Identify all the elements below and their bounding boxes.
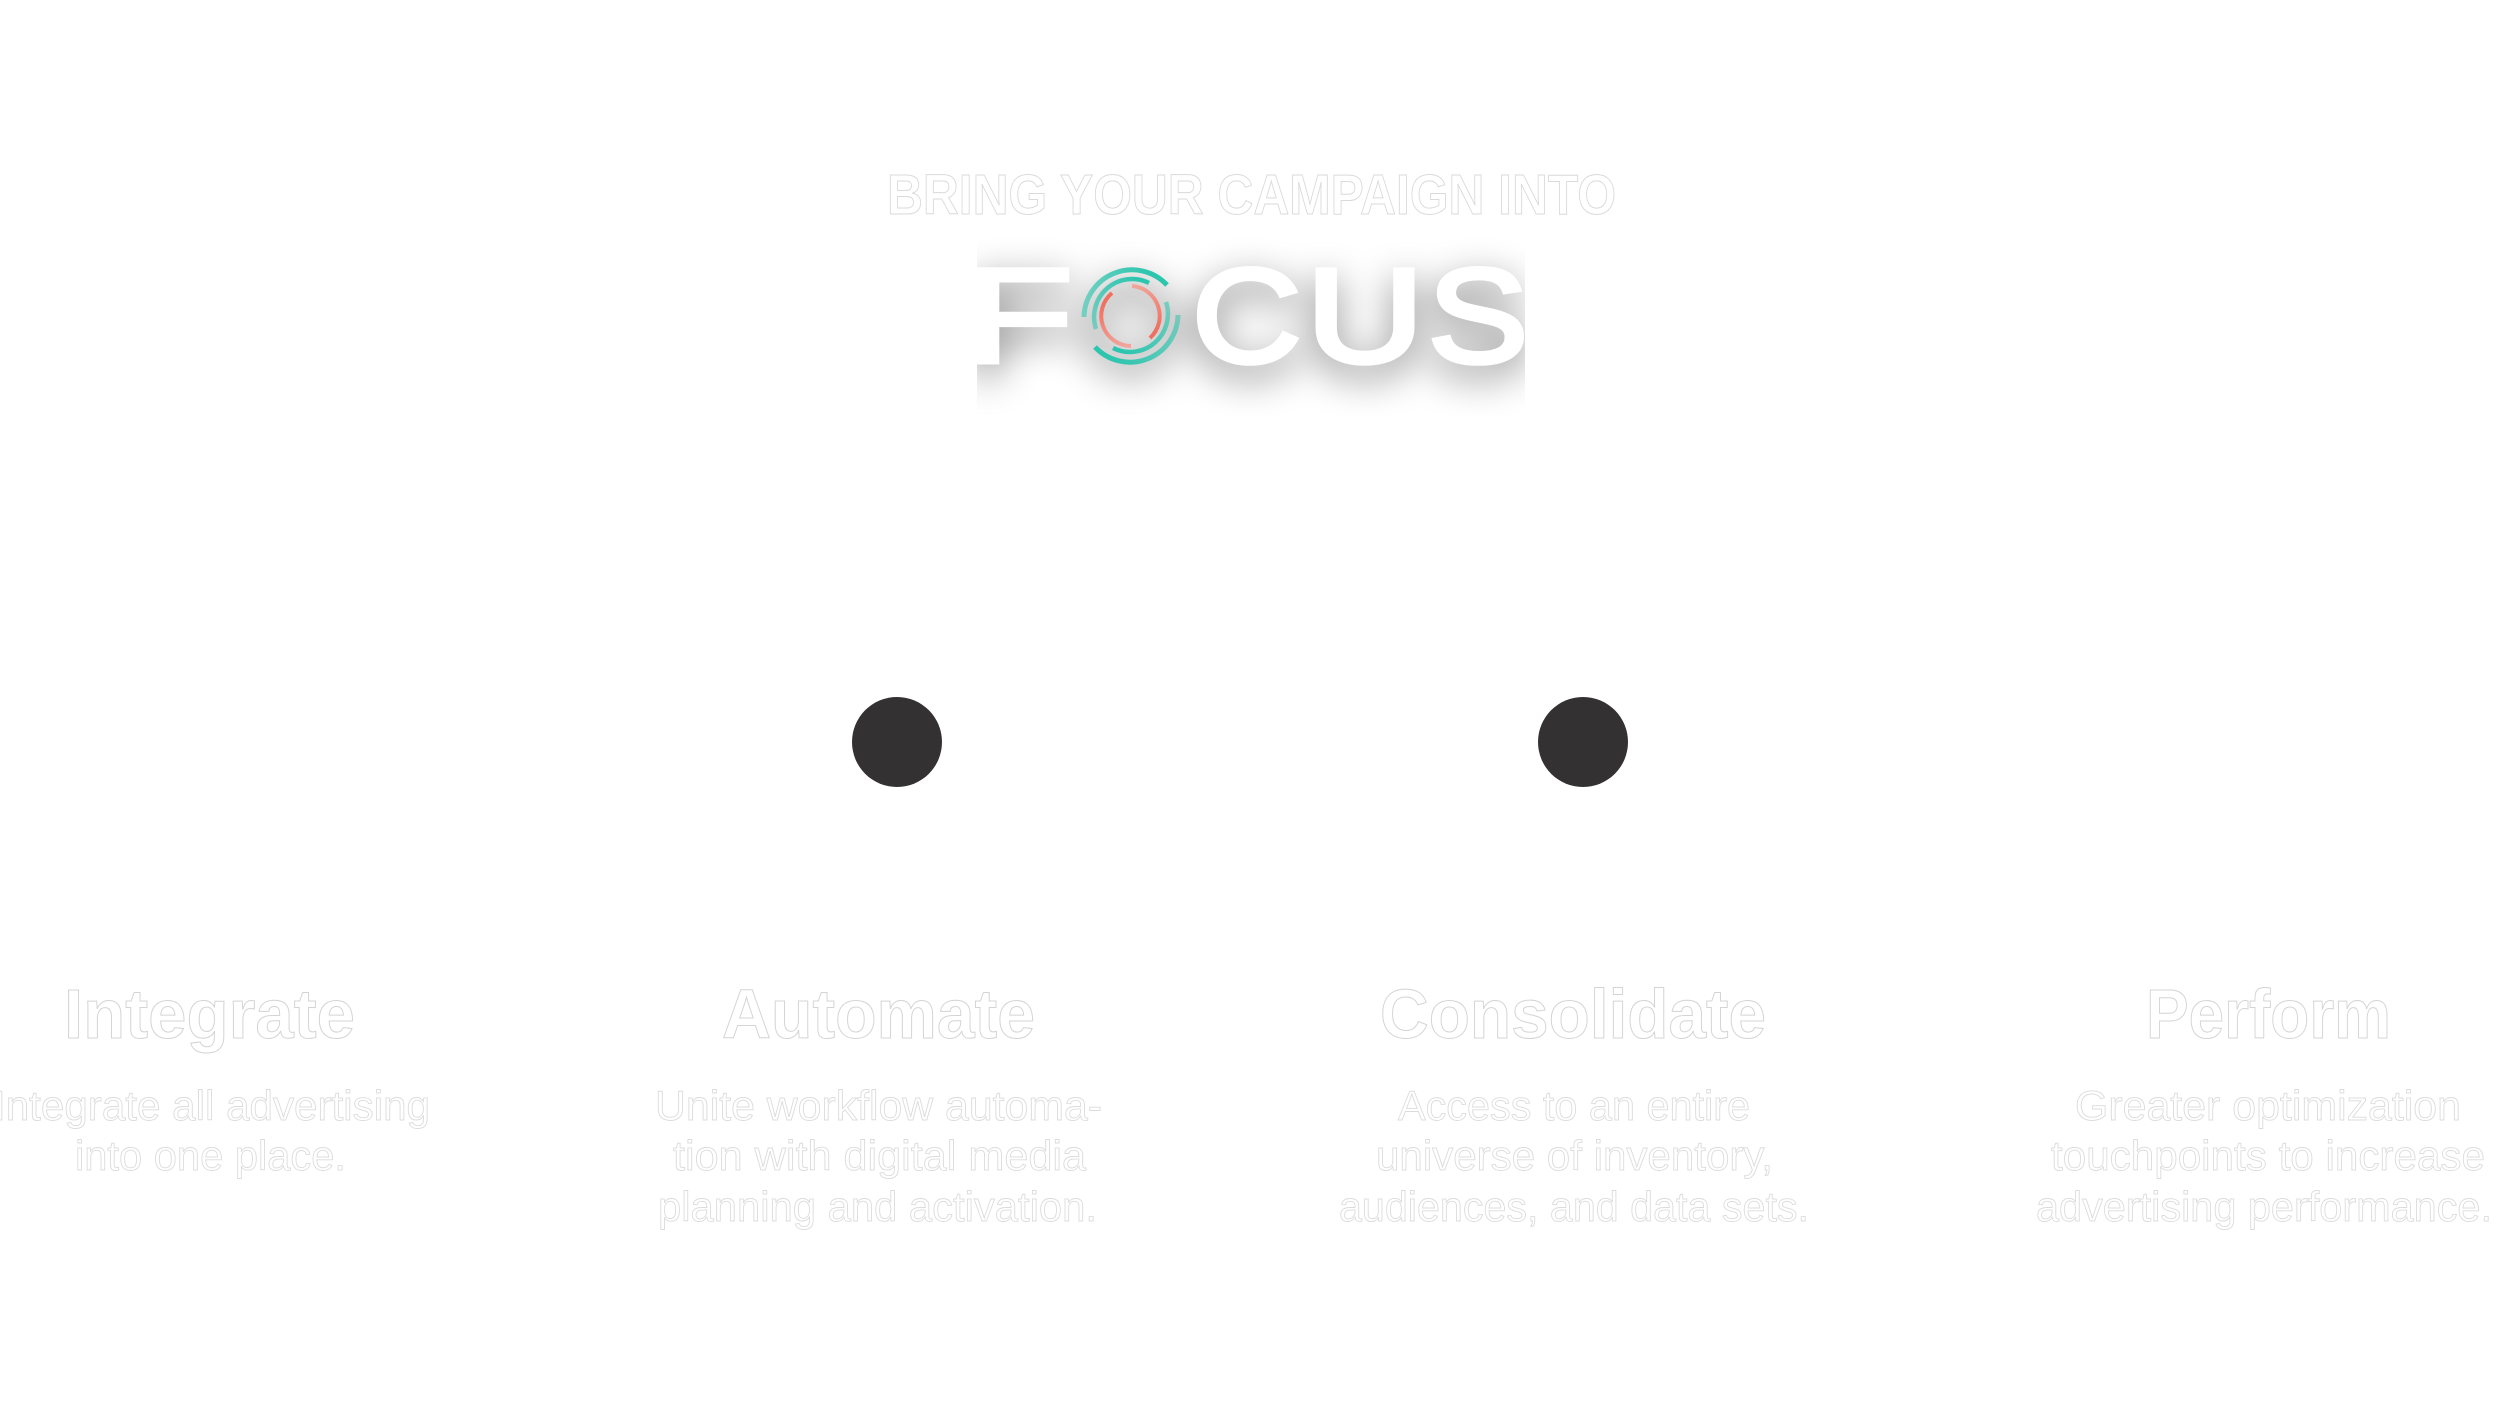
body: Automate (655, 1082, 1102, 1230)
body: Integrate: Integrate all advertising (0, 1082, 430, 1129)
body: Perform: Greater optimization (2075, 1082, 2461, 1129)
letter C: C (1192, 242, 1301, 391)
body: Automate: tion with digital media (673, 1132, 1087, 1179)
heading: Automate: Automate (722, 975, 1035, 1053)
heading: Consolidate: Consolidate (1380, 975, 1766, 1053)
letter F: F (965, 242, 1073, 391)
body: Consolidate (1339, 1082, 1809, 1230)
column: Consolidate (1339, 975, 1809, 1230)
column: Automate (655, 975, 1102, 1230)
letter U: U (1306, 241, 1424, 391)
icon: focus rings replacing the letter O (1084, 270, 1178, 362)
column: Perform (2036, 975, 2492, 1230)
FOCUS wordmark shadow (965, 253, 1528, 403)
body: Integrate (0, 1082, 430, 1179)
FOCUS wordmark shadow: S (1428, 253, 1528, 403)
FOCUS wordmark (965, 241, 1528, 391)
body: Integrate: into one place. (75, 1132, 346, 1179)
body: Perform: advertising performance. (2036, 1183, 2492, 1230)
heading: Perform: Perform (2146, 975, 2391, 1053)
FOCUS wordmark shadow: F (965, 254, 1073, 403)
FOCUS wordmark shadow: U (1306, 253, 1424, 403)
FOCUS wordmark shadow: C (1192, 254, 1301, 403)
body: Consolidate: Access to an entire (1398, 1082, 1750, 1129)
body: Automate: Unite workflow automa- (655, 1082, 1102, 1129)
body: Automate: planning and activation. (658, 1183, 1097, 1230)
dark dot left (852, 697, 942, 787)
body: Consolidate: universe of inventory, (1376, 1132, 1773, 1179)
heading: Integrate: Integrate (64, 975, 355, 1053)
letter S: S (1428, 241, 1528, 391)
body: Consolidate: audiences, and data sets. (1339, 1183, 1809, 1230)
body: Perform (2036, 1082, 2492, 1230)
dark dot right (1538, 697, 1628, 787)
body: Perform: touchpoints to increase (2051, 1132, 2485, 1179)
title line: BRING YOUR CAMPAIGN INTO (887, 163, 1616, 227)
column: Integrate (0, 975, 430, 1179)
